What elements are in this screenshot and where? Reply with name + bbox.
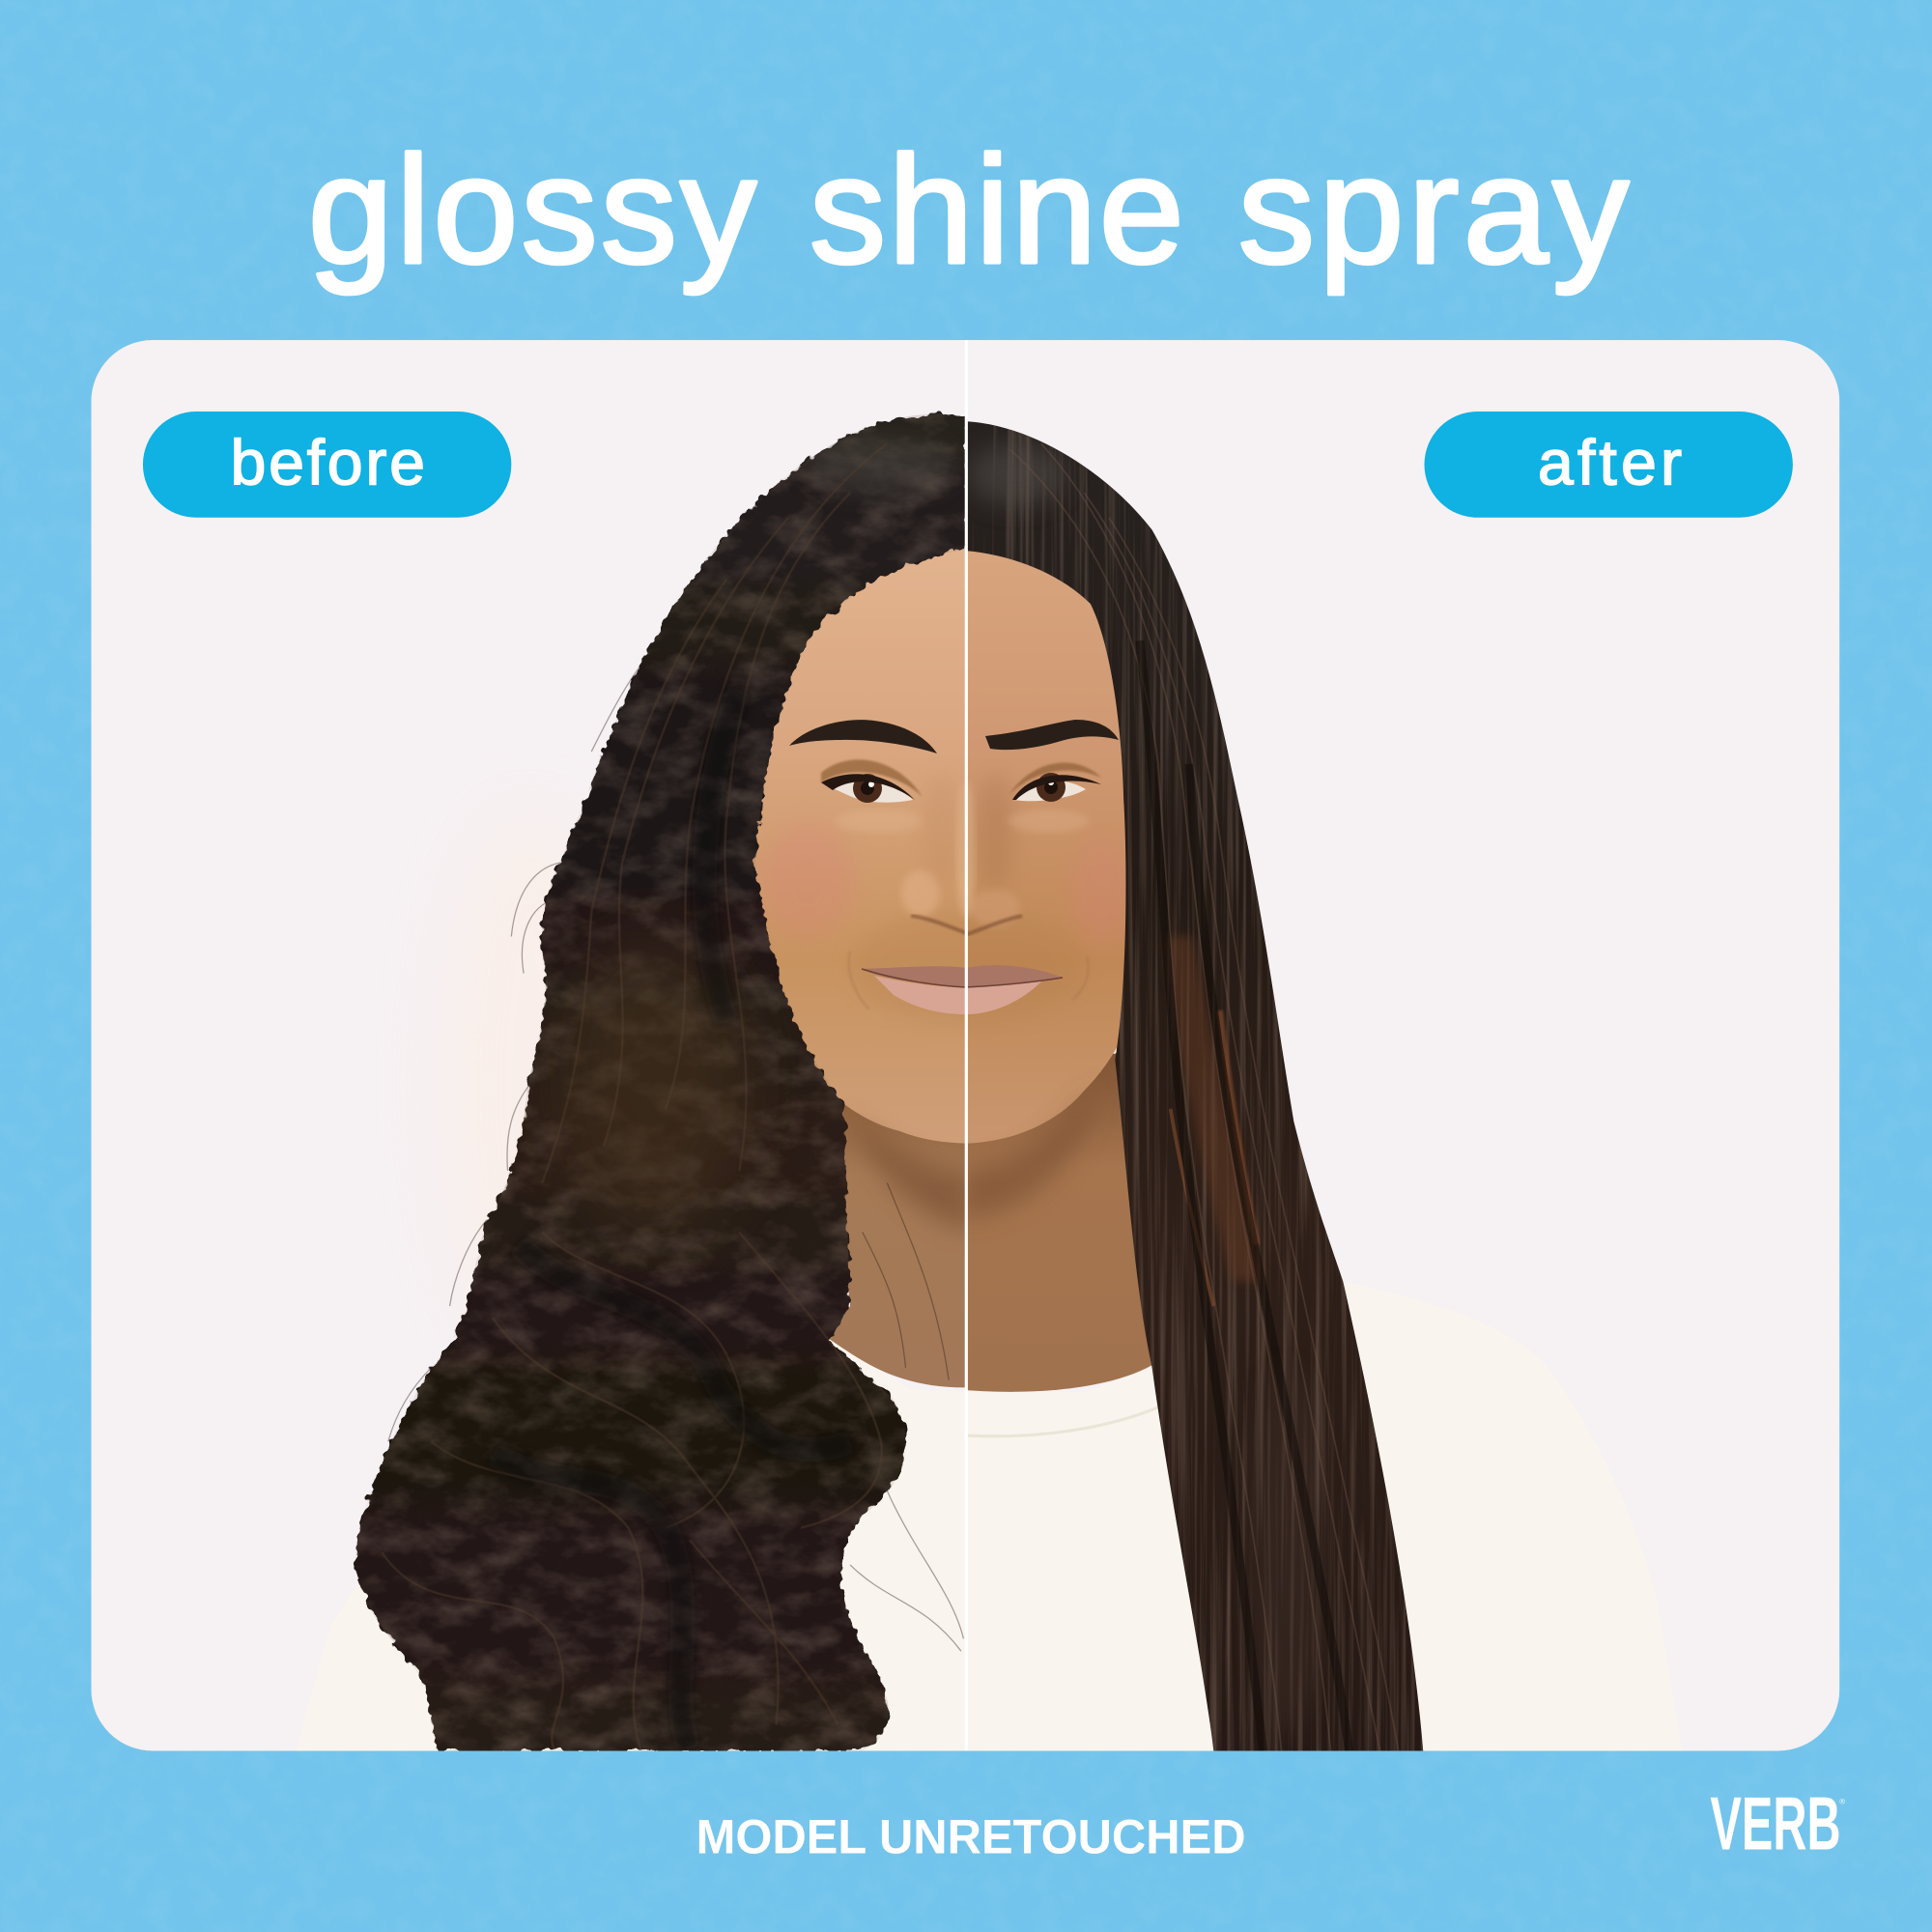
centre divider line: [965, 340, 968, 1751]
brand logo: VERB: [1710, 1783, 1841, 1866]
under-eye shading: [836, 810, 1089, 833]
brand logo: [1710, 1783, 1845, 1866]
shirt collar seam: [966, 1405, 1164, 1436]
chin shadow: after: [961, 1084, 1096, 1220]
badge: before: [143, 412, 511, 518]
panel: after half: [968, 421, 1424, 1750]
auburn highlights: [1164, 936, 1263, 1282]
brand logo: ®: [1839, 1797, 1845, 1805]
shirt: after: [961, 1282, 1682, 1750]
nose: shading: [901, 773, 1022, 934]
footer note: MODEL UNRETOUCHED: [696, 1809, 1246, 1863]
eye: before: [821, 774, 915, 803]
shirt: before: [296, 1338, 974, 1750]
crown highlight: [967, 443, 1065, 505]
smile lines: [849, 952, 1089, 1009]
hair: after: [966, 419, 1435, 1756]
hair: before: [345, 407, 974, 1756]
muzzle shading: [850, 908, 1082, 1024]
brown mid lengths: [554, 936, 752, 1233]
eye: after: [1012, 773, 1101, 802]
panel: before half: [354, 412, 965, 1750]
crown highlight: [807, 439, 955, 493]
lips: before: [862, 966, 966, 1014]
backlight glow behind before hair: [477, 869, 552, 1219]
title: shine: [810, 125, 1184, 296]
blush: before: [786, 844, 829, 871]
straight hair strands: [1010, 443, 1399, 1750]
eyebrow: before: [789, 720, 937, 753]
facial features: [789, 720, 1119, 1024]
hair strands and curls: [382, 443, 887, 1749]
eyebrow: after: [985, 720, 1119, 750]
deep curl shadows: [493, 690, 850, 1749]
badge: after: after: [1538, 427, 1682, 498]
face: after: [961, 537, 1158, 1144]
title: [308, 125, 1629, 296]
title: spray: [1238, 125, 1629, 296]
flyaway hairs: [388, 666, 963, 1651]
eyeshadow: before: [821, 759, 923, 797]
dark strand shadows: [1140, 640, 1350, 1750]
neck: before: [829, 1104, 965, 1387]
chin shadow: before: [860, 1132, 965, 1234]
title: glossy: [308, 125, 756, 296]
face: before: [752, 545, 965, 1144]
badge: before: before: [231, 427, 425, 498]
lips: after: [966, 965, 1063, 1014]
neck: after: [968, 1053, 1151, 1392]
badge: after: [1424, 412, 1793, 518]
eyeshadow: after: [1009, 763, 1101, 794]
blush: after: [1073, 839, 1132, 948]
panel: before and after portrait: [91, 340, 1839, 1756]
